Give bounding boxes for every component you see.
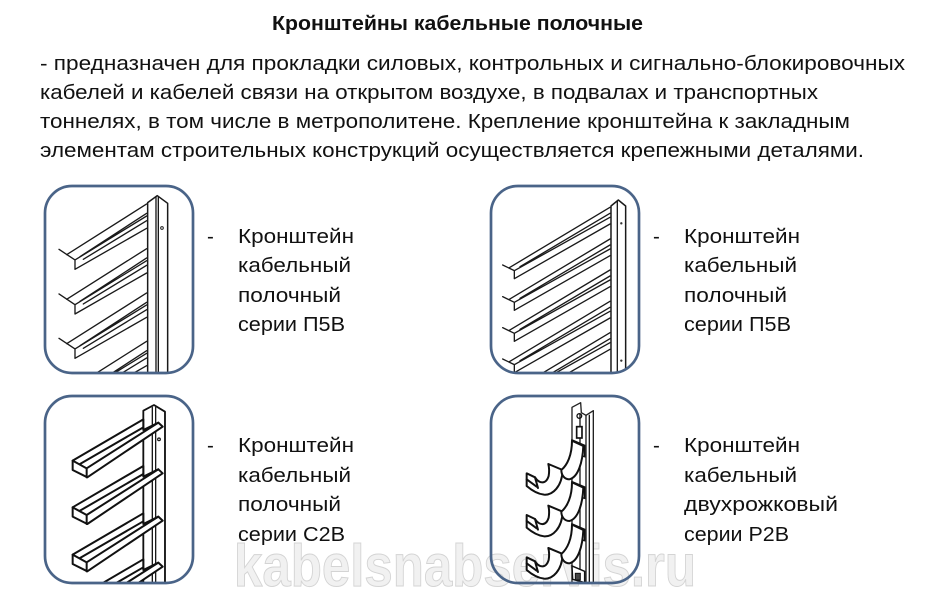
label: P5V right: Кронштейн xyxy=(684,225,800,248)
description text block xyxy=(40,52,906,162)
label: P5V left xyxy=(207,225,354,336)
panel: bracket P5V right xyxy=(490,184,640,374)
label: C2V: полочный xyxy=(238,493,341,516)
label: R2V: кабельный xyxy=(684,464,797,487)
label: P5V left: Кронштейн xyxy=(238,225,354,248)
description text block: тоннелях, в том числе в метрополитене. Крепление кронштейна к закладным xyxy=(40,110,850,133)
label: P5V left: кабельный xyxy=(238,254,351,277)
label: P5V right xyxy=(653,225,800,336)
label: C2V: серии С2В xyxy=(238,523,345,546)
label: C2V: Кронштейн xyxy=(238,434,354,457)
label: R2V: двухрожковый xyxy=(684,493,838,516)
label: P5V left: - xyxy=(207,225,214,248)
label: R2V: серии Р2В xyxy=(684,523,789,546)
label: P5V left: серии П5В xyxy=(238,313,345,336)
panel: bracket P5V left xyxy=(44,184,194,374)
label: R2V: Кронштейн xyxy=(684,434,800,457)
label: R2V: - xyxy=(653,434,660,457)
panel: hook bracket R2V xyxy=(491,396,639,587)
panel: bracket C2V xyxy=(45,396,193,593)
description text block: элементам строительных конструкций осуществляется крепежными деталями. xyxy=(40,139,864,162)
description text block: кабелей и кабелей связи на открытом воздухе, в подвалах и транспортных xyxy=(40,81,819,104)
label: P5V right: серии П5В xyxy=(684,313,791,336)
title: Кронштейны кабельные полочные xyxy=(272,13,643,35)
label: R2V xyxy=(653,434,838,546)
label: P5V right: кабельный xyxy=(684,254,797,277)
label: C2V xyxy=(207,434,354,546)
description text block: - предназначен для прокладки силовых, контрольных и сигнально-блокировочных xyxy=(40,52,906,75)
label: P5V right: полочный xyxy=(684,284,787,307)
label: P5V left: полочный xyxy=(238,284,341,307)
label: C2V: кабельный xyxy=(238,464,351,487)
label: C2V: - xyxy=(207,434,214,457)
label: P5V right: - xyxy=(653,225,660,248)
